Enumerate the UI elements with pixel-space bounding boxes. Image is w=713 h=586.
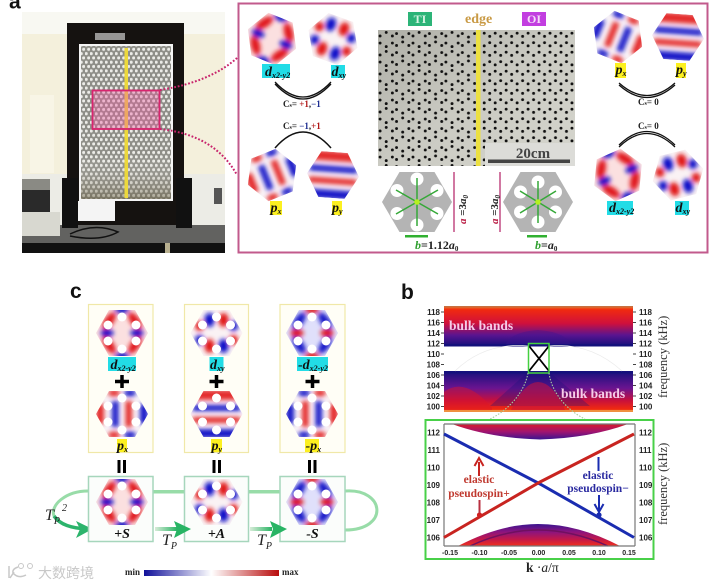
label d xy right [675, 201, 690, 216]
left tick labels: 106 [427, 371, 441, 380]
left tick labels: 104 [427, 382, 441, 390]
label a=3a0 OI: a =3a [489, 198, 501, 224]
red pseudospin line [444, 434, 634, 538]
right tick labels: 110 [639, 350, 652, 359]
operator T_P 2: P [265, 541, 272, 552]
upper bulk bands [444, 307, 633, 346]
right tick labels: 100 [639, 402, 653, 412]
band curve upper [275, 132, 331, 148]
operator T_P squared: T [45, 507, 54, 524]
arrow 2-3 [250, 521, 287, 538]
frequency axis title zoom: frequency (kHz) [656, 443, 670, 525]
label b=a0: b=a [535, 238, 554, 252]
label bulk bands bottom: bulk bands [561, 386, 625, 401]
left y ticks: 112 [427, 428, 441, 438]
bar b TI [405, 235, 428, 238]
label p x: p [270, 201, 278, 216]
dirac cross [529, 346, 549, 371]
right tick labels: 116 [639, 318, 652, 328]
label d xy: d [210, 358, 217, 373]
+S mode [95, 476, 149, 528]
left y ticks: 107 [427, 516, 441, 525]
dotted zoom lines [160, 58, 237, 175]
-S box [280, 476, 345, 542]
label d x2-y2 right: d [609, 201, 616, 216]
band curve lower [275, 82, 331, 99]
left y ticks: 111 [428, 446, 441, 455]
right tick labels: 112 [639, 340, 652, 348]
label elastic pseudospin -: pseudospin− [567, 483, 629, 495]
label p y: p [212, 439, 218, 454]
mode p x [95, 390, 149, 438]
label b=1.12a0: b=1.12a [415, 238, 455, 252]
+A text: +A [208, 527, 225, 542]
label d x2-y2 right: x2-y2 [615, 207, 634, 216]
mode d xy [190, 309, 244, 357]
mode p y [190, 390, 244, 438]
Cs label 0 upper: Cs= 0 [638, 121, 659, 131]
left y ticks [427, 428, 441, 542]
equals bars column 1 [119, 460, 124, 473]
operator T_P 2: T [257, 532, 266, 549]
Cs label 0 lower: Cs= 0 [638, 97, 659, 107]
right y ticks: 108 [639, 498, 653, 508]
watermark: 大数跨境 [38, 565, 94, 581]
right y ticks: 106 [639, 534, 653, 542]
right tick labels: 102 [639, 392, 653, 401]
connector 2-3 top [248, 490, 280, 494]
zoom chart box [426, 420, 654, 559]
blue dot [596, 512, 602, 518]
plus [306, 375, 320, 388]
arrow 1-2 [155, 521, 191, 538]
label p y: p [332, 201, 339, 216]
right y ticks: 110 [639, 464, 652, 472]
label p y right: y [682, 69, 687, 78]
mode: p x top right [584, 4, 652, 70]
upper band cap [452, 424, 628, 440]
label p y: y [338, 207, 343, 216]
red arrow stub [478, 500, 480, 513]
right tick labels: 106 [639, 371, 653, 380]
mode: d xy bottom right [646, 145, 710, 205]
arrow a TI [453, 172, 455, 232]
label d x2-y2 [108, 357, 136, 373]
label p x right: x [622, 69, 626, 78]
mode: d x2-y2 bottom right [583, 140, 653, 210]
left y ticks: 110 [427, 464, 441, 472]
blue stub [598, 457, 600, 471]
zoom box [528, 344, 549, 373]
label p x [116, 439, 128, 454]
equals bars column 2 [214, 460, 220, 473]
x ticks: 0.00 [532, 550, 545, 557]
red dot [477, 512, 482, 518]
label d x2-y2 [262, 64, 290, 80]
red arrow up [474, 458, 484, 476]
right tick labels: 108 [639, 360, 653, 370]
lower bulk bands [444, 371, 633, 412]
equals bars column 3 [310, 460, 315, 473]
TI tag: TI [414, 12, 427, 26]
label -p x: -p [306, 439, 317, 454]
loop arrow left [53, 491, 92, 538]
x ticks: -0.05 [501, 550, 517, 557]
label a=3a0 TI: a =3a [457, 198, 469, 224]
panel c: column 3 box [280, 304, 345, 454]
band curve right lower [619, 83, 675, 98]
label p y [331, 201, 343, 216]
label d x2-y2: d [110, 358, 118, 373]
blue arrow down [594, 495, 604, 512]
mode: p y left [304, 149, 362, 201]
x ticks: -0.15 [442, 550, 458, 557]
label p x right [614, 63, 626, 78]
colour legend: max [282, 567, 299, 577]
mode d x2-y2 [95, 306, 149, 360]
operator T_P squared: 2 [62, 503, 67, 514]
band chart top [427, 306, 670, 412]
left tick labels: 116 [427, 318, 441, 328]
connector 1-2 top [153, 490, 185, 494]
operator T_P squared: P [53, 516, 60, 527]
label d x2-y2 right [607, 201, 634, 216]
blue pseudospin line [444, 434, 634, 538]
x ticks: -0.10 [472, 550, 488, 557]
edge label: edge [465, 12, 492, 27]
left tick labels: 108 [427, 360, 441, 370]
lower band cap [458, 524, 620, 546]
label d xy: d [332, 65, 338, 80]
band curve right upper [619, 132, 675, 147]
label d x2-y2: d [265, 65, 272, 80]
photo: experimental setup [22, 12, 225, 253]
OI unit cell [503, 172, 573, 232]
left y ticks: 108 [427, 498, 441, 508]
Cs label -1 +1: Cs= −1,+1 [283, 121, 321, 131]
label -d x2-y2: -d [298, 358, 310, 373]
+S box [88, 476, 153, 542]
right tick labels: 104 [639, 382, 653, 390]
left tick labels: 112 [427, 340, 441, 348]
Cs label +1 -1: Cs= +1,−1 [283, 99, 321, 109]
zoom rectangle on photo [92, 90, 160, 129]
operator T_P 1: T [162, 532, 171, 549]
mode p x negative [285, 390, 339, 438]
right y ticks [639, 428, 653, 542]
colour legend [125, 567, 299, 577]
label elastic pseudospin +: elastic [464, 474, 494, 486]
right y ticks: 109 [639, 481, 653, 490]
x ticks: 0.15 [622, 550, 636, 557]
left tick labels: 118 [427, 308, 441, 317]
label p y: y [218, 445, 222, 454]
label elastic pseudospin +: pseudospin+ [448, 488, 510, 500]
label d xy: xy [216, 364, 225, 373]
sample close-up photo [378, 30, 575, 166]
TI unit cell [382, 172, 452, 232]
right y ticks: 112 [639, 428, 652, 438]
left tick labels [427, 308, 441, 412]
scale bar: 20cm [516, 146, 551, 162]
OI tag: OI [527, 12, 541, 26]
label p x: x [276, 207, 282, 216]
watermark [9, 564, 94, 581]
panel letter b: b [401, 281, 414, 304]
scale bar [488, 146, 570, 163]
label p x [270, 201, 282, 216]
label bulk bands top: bulk bands [449, 318, 513, 333]
x ticks [442, 550, 636, 557]
label d x2-y2: x2-y2 [116, 364, 136, 373]
label b=1.12a0: 0 [455, 245, 459, 253]
label a=3a0 TI: 0 [462, 194, 470, 198]
faint gap curves [455, 346, 622, 371]
OI tag [522, 12, 546, 26]
panel a: zoomed detail box [237, 4, 710, 253]
label d xy right: d [676, 201, 682, 216]
-S mode [285, 476, 339, 528]
dotted projection lines [490, 373, 585, 419]
x ticks: 0.05 [562, 550, 576, 557]
label p x: p [117, 439, 124, 454]
mode: d x2-y2 top left [237, 4, 307, 74]
label b=a0: 0 [554, 245, 558, 253]
label a=3a0 OI: 0 [494, 194, 502, 198]
label d xy [210, 357, 225, 373]
label d xy [331, 65, 346, 80]
plot frame [444, 424, 635, 546]
+A box [184, 476, 248, 542]
right tick labels: 114 [639, 329, 652, 338]
-S text: -S [306, 527, 319, 542]
label -d x2-y2 [297, 357, 328, 373]
label d xy: xy [338, 71, 346, 80]
panel letter c: c [70, 280, 82, 303]
right y ticks: 107 [639, 516, 653, 525]
label p y [210, 439, 222, 454]
label p x right: p [616, 63, 622, 78]
panel c: column 1 box [88, 304, 153, 454]
label -p x: x [316, 445, 321, 454]
mode -d x2-y2 [285, 306, 339, 360]
label d xy right: xy [682, 207, 690, 216]
plus [115, 375, 129, 388]
x axis title: k ·a/π [526, 560, 559, 575]
label p y right: p [676, 63, 683, 78]
frequency axis title: frequency (kHz) [656, 316, 670, 398]
operator T_P 1: P [170, 541, 177, 552]
label -d x2-y2: x2-y2 [309, 364, 328, 373]
left y ticks: 109 [427, 481, 441, 490]
bar b OI [527, 235, 547, 238]
left tick labels: 100 [427, 402, 441, 412]
+A mode [190, 478, 244, 526]
label p y right [675, 63, 687, 78]
connector right loop [345, 491, 377, 530]
left tick labels: 102 [427, 392, 441, 401]
label d x2-y2: x2-y2 [271, 71, 290, 80]
mode: d xy top left [299, 7, 367, 71]
x ticks: 0.10 [592, 550, 606, 557]
plus [210, 375, 224, 388]
right tick labels [639, 308, 653, 412]
right tick labels: 118 [639, 308, 652, 317]
right y ticks: 111 [639, 446, 652, 455]
mode: p x left [238, 142, 306, 208]
+S text: +S [114, 527, 130, 542]
TI tag [408, 12, 432, 26]
left tick labels: 110 [427, 350, 441, 359]
label elastic pseudospin -: elastic [583, 470, 613, 482]
mode: p y top right [649, 11, 707, 63]
left y ticks: 106 [427, 534, 441, 542]
arrow a OI [499, 172, 501, 232]
left tick labels: 114 [427, 329, 441, 338]
label p x: x [123, 445, 128, 454]
colour legend: min [125, 567, 140, 577]
panel c: column 2 box [184, 304, 248, 454]
